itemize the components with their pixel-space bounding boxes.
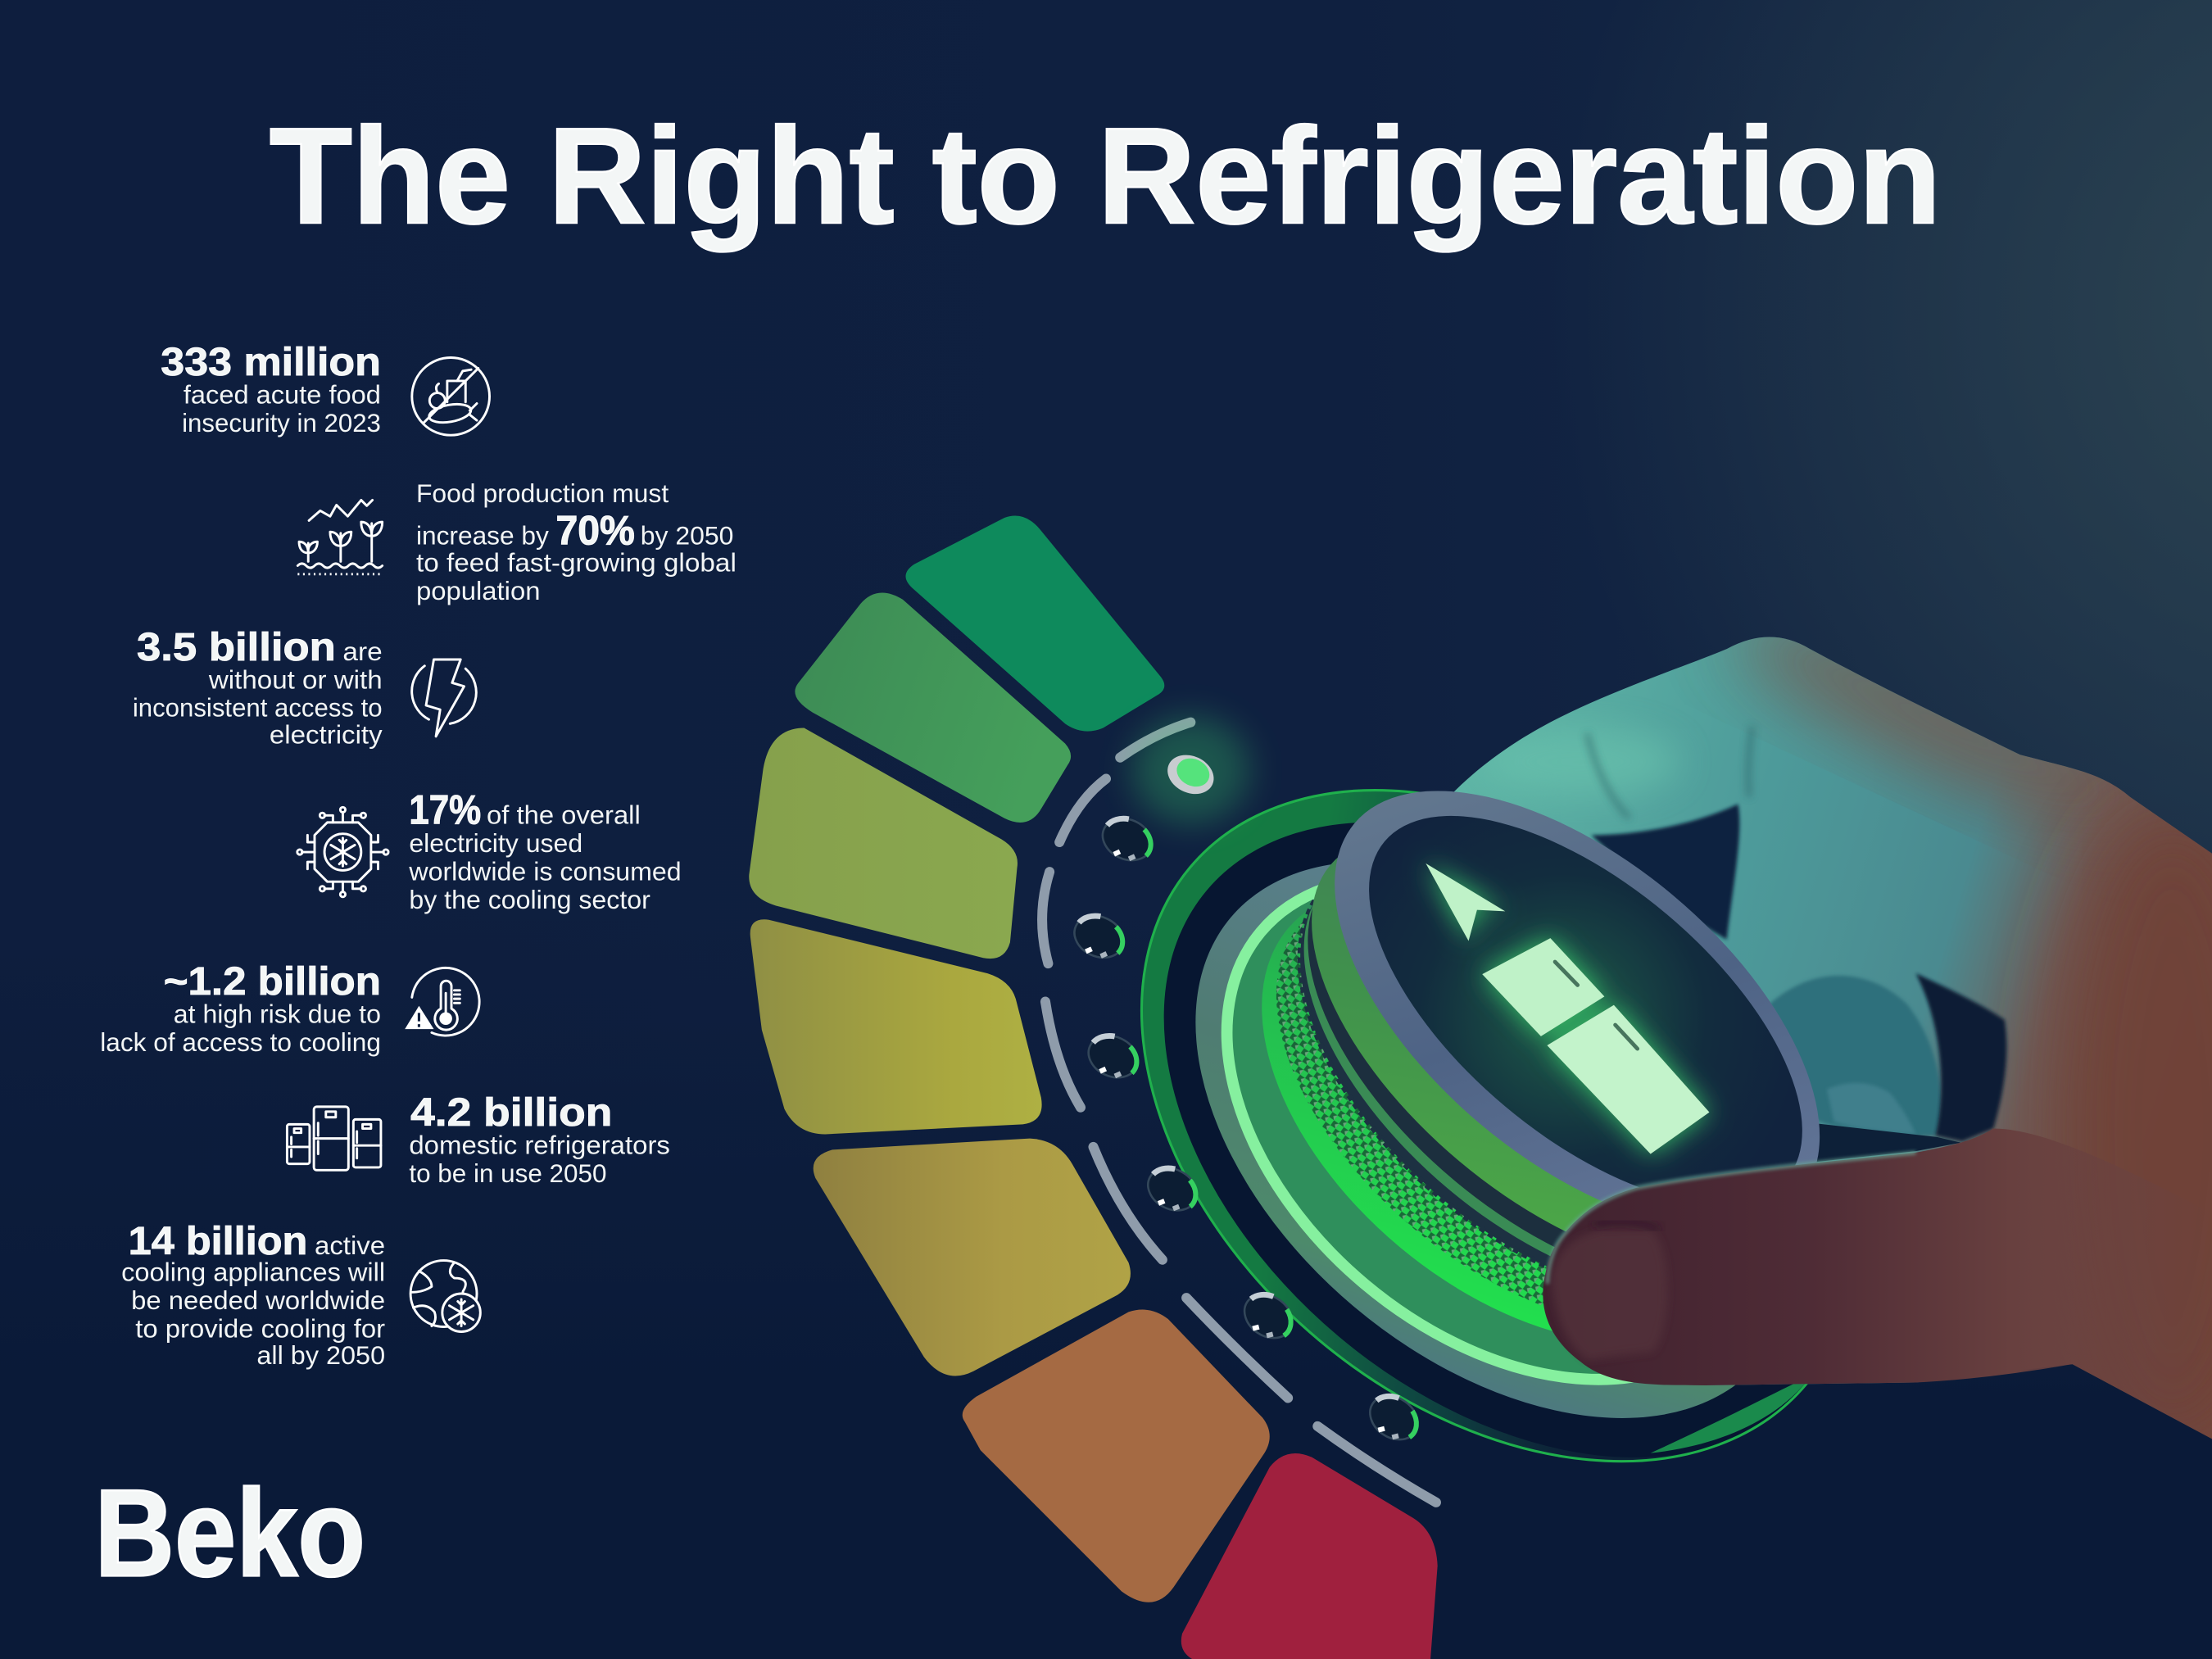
- plate glow lower right: [1651, 1376, 1811, 1453]
- segment 6 orange: [963, 1310, 1270, 1602]
- stat: 333 million: [161, 340, 381, 437]
- collar: [1090, 750, 1901, 1530]
- light 1 active: [1161, 748, 1220, 801]
- light 5: [1140, 1160, 1204, 1218]
- stat: 3.5 billion: [133, 625, 383, 749]
- icon: plants growth: [297, 500, 383, 574]
- knurled band: [1177, 797, 1842, 1432]
- segment 5 mustard: [814, 1139, 1131, 1376]
- stat: 3.5 billion: 3.5 billion: [137, 625, 336, 669]
- hand: red tones: [1481, 587, 2212, 1453]
- stat: 3.5 billion: without or with: [208, 664, 383, 694]
- stat: 14 billion: all by 2050: [256, 1340, 385, 1370]
- icon: lightning: [412, 660, 476, 737]
- stat: food production 70%: to feed fast-growing global: [416, 547, 737, 577]
- stat: 17%: by the cooling sector: [409, 885, 650, 914]
- stat: 3.5 billion: are: [342, 637, 383, 666]
- stat: 14 billion: be needed worldwide: [131, 1285, 385, 1315]
- stat: 14 billion: active: [315, 1231, 385, 1260]
- serrated edge: [1220, 766, 1870, 1384]
- logo: Beko: Beko: [94, 1464, 365, 1602]
- stat: 1.2 billion: ~1.2 billion: [164, 959, 381, 1004]
- inner plate: [1041, 694, 1966, 1586]
- stat: 4.2 billion: to be in use 2050: [409, 1158, 606, 1188]
- gauge: tick arcs: [1042, 723, 1436, 1503]
- stat: food production 70%: increase by: [416, 521, 549, 551]
- knurl texture: [1198, 805, 1833, 1410]
- stat: 333 million: insecurity in 2023: [182, 408, 381, 437]
- icon: thermometer warning: [405, 968, 479, 1036]
- gap under fingers: [1811, 1123, 1960, 1163]
- stat: 14 billion: [121, 1219, 385, 1370]
- segment 4 yellow olive: [750, 919, 1042, 1134]
- stat: food production 70%: Food production must: [416, 478, 669, 508]
- icon: arrow: [1426, 863, 1505, 941]
- segment 1 dark green: [905, 516, 1164, 732]
- icon: fridge: [1482, 938, 1709, 1154]
- curled fingers: [1769, 976, 1942, 1137]
- dial: knob body: [1090, 750, 1901, 1530]
- stat: 17%: 17%: [409, 787, 481, 833]
- stat: 4.2 billion: 4.2 billion: [410, 1090, 612, 1135]
- gauge: colour segments: [749, 516, 1438, 1659]
- stat: 17%: of the overall: [487, 800, 641, 830]
- stat: 333 million: faced acute food: [184, 379, 381, 409]
- stat: 3.5 billion: electricity: [270, 719, 383, 749]
- segment 7 red: [1181, 1453, 1438, 1659]
- outer plate: [1011, 653, 1986, 1598]
- cap face: [1304, 746, 1867, 1275]
- gauge: indicator lights: [1067, 717, 1426, 1448]
- icon: refrigerators: [287, 1107, 381, 1170]
- bright ring: [1131, 776, 1861, 1481]
- segment 3 olive: [749, 728, 1018, 959]
- light 6: [1236, 1285, 1300, 1347]
- icon: no food: [412, 358, 490, 435]
- stat: 17%: [408, 787, 682, 914]
- stat: 17%: worldwide is consumed: [408, 856, 682, 886]
- stat: 1.2 billion: [100, 959, 381, 1057]
- green wall: [1238, 755, 1865, 1347]
- stat: 4.2 billion: domestic refrigerators: [409, 1131, 670, 1160]
- stat: 1.2 billion: lack of access to cooling: [100, 1027, 381, 1057]
- hand: creases: [1587, 727, 1752, 818]
- icon: cooling chip: [297, 807, 388, 897]
- hand: back of hand and fingers: [1444, 587, 2212, 1453]
- dial: base plate: [1011, 653, 1986, 1598]
- finger nail: [1827, 1083, 1915, 1134]
- title: The Right to Refrigeration: [270, 100, 1941, 252]
- stat: 1.2 billion: at high risk due to: [174, 999, 381, 1028]
- gap in palm: [1915, 973, 2006, 1141]
- plate rim line: [1011, 653, 1986, 1598]
- stat: 17%: electricity used: [409, 828, 582, 858]
- green step: [1226, 769, 1865, 1375]
- segment 2 green: [795, 592, 1071, 823]
- light 7: [1362, 1387, 1426, 1448]
- thumbnail: [1552, 1231, 1667, 1360]
- stat: food production 70%: by 2050: [641, 521, 733, 551]
- stat: 4.2 billion: [409, 1090, 670, 1188]
- stat: 14 billion: to provide cooling for: [135, 1313, 385, 1343]
- light 4: [1081, 1028, 1145, 1086]
- hand: thumb: [1543, 1129, 2212, 1439]
- stat: 14 billion: cooling appliances will: [121, 1258, 385, 1287]
- light 3: [1067, 908, 1131, 965]
- cap ring: [1258, 709, 1896, 1312]
- stat: 14 billion: 14 billion: [129, 1219, 307, 1263]
- stat: 3.5 billion: inconsistent access to: [133, 693, 383, 723]
- stat: food production 70%: [416, 478, 737, 605]
- icon: globe and snowflake: [410, 1261, 480, 1332]
- dark groove: [1232, 767, 1865, 1366]
- thumb rim light: [1548, 1153, 1915, 1284]
- stat: food production 70%: population: [416, 576, 541, 605]
- stat: 333 million: 333 million: [161, 340, 381, 384]
- stat: food production 70%: 70%: [555, 508, 635, 554]
- gap between index finger and dial: [1591, 805, 1739, 940]
- light 2: [1096, 811, 1158, 868]
- dial: cap: [1258, 709, 1896, 1312]
